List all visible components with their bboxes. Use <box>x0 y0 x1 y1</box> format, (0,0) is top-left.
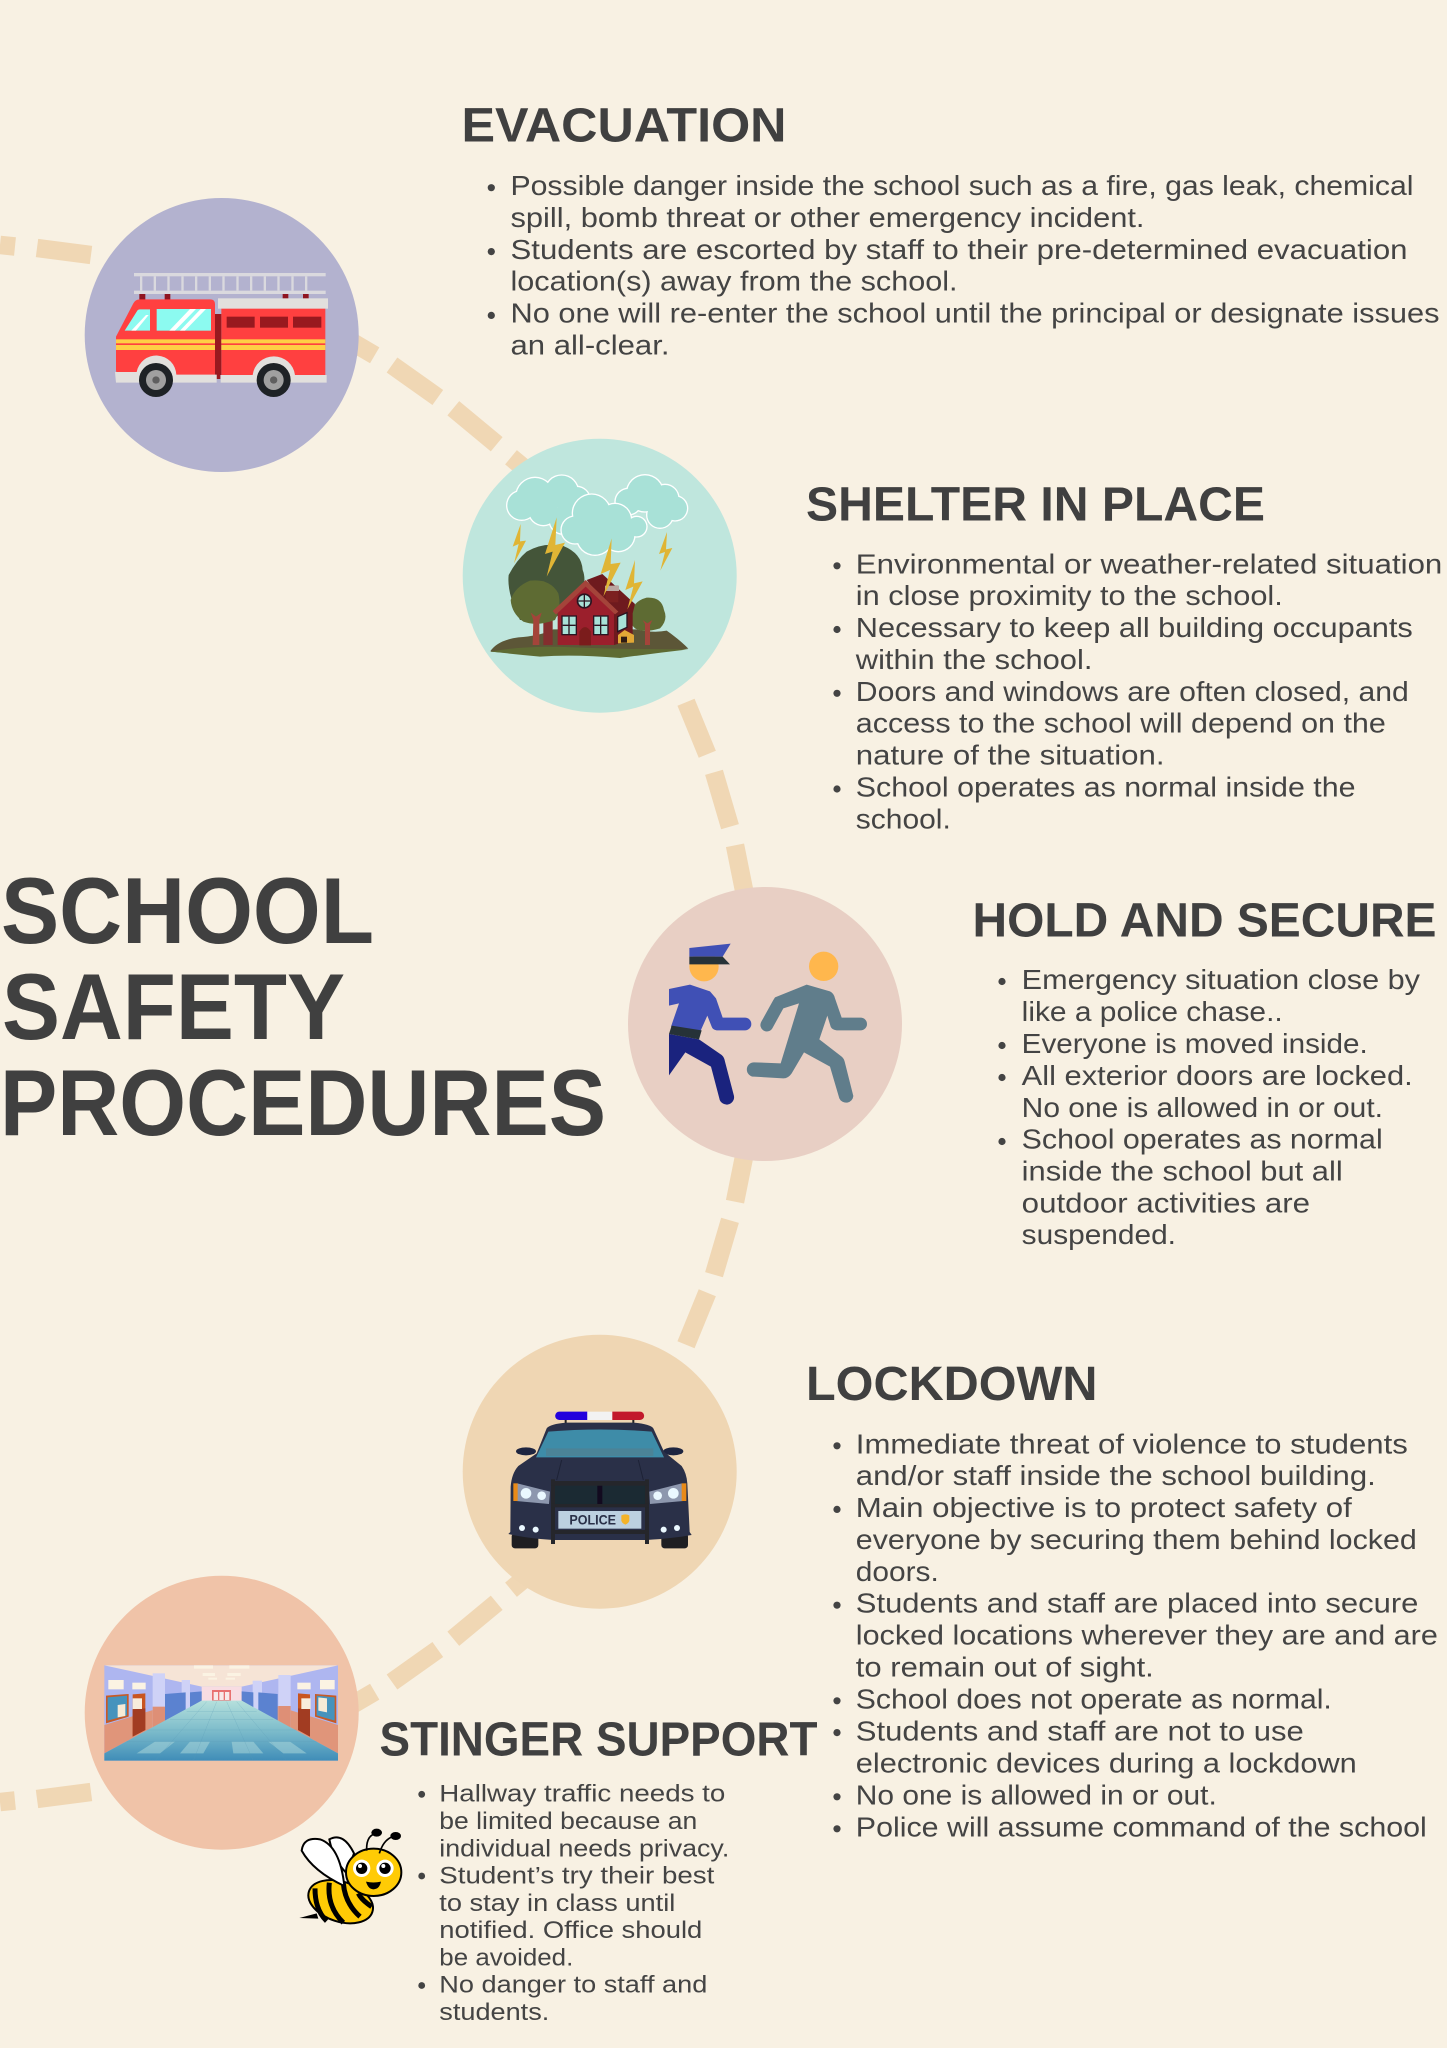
list: lockdown points: Main objective is to protect safety of <box>856 1492 1352 1523</box>
icon: police car: POLICE <box>569 1513 616 1528</box>
list: lockdown points: locked locations wherever they are and are <box>856 1620 1438 1651</box>
list: hold and secure points: School operates as normal <box>1022 1124 1383 1155</box>
list: stinger support points: No danger to staff and <box>439 1972 707 1999</box>
title: SAFETY <box>2 954 345 1059</box>
panel: shelter text <box>806 479 1442 834</box>
list: shelter points: nature of the situation. <box>856 740 1164 771</box>
list: hold and secure points: like a police chase.. <box>1022 996 1283 1027</box>
list: lockdown points: No one is allowed in or out. <box>856 1779 1217 1810</box>
list: evacuation points <box>488 170 1440 360</box>
icon: house in storm <box>491 474 688 658</box>
panel: stinger support text <box>380 1714 818 2026</box>
list: stinger support points: notified. Office should <box>439 1917 702 1944</box>
list: lockdown points: everyone by securing them behind locked <box>856 1524 1417 1555</box>
icon: bee mascot <box>299 1829 401 1931</box>
list: evacuation points: Possible danger inside the school such as a fire, gas leak, chemical <box>510 170 1414 201</box>
list: lockdown points: Immediate threat of violence to students <box>856 1428 1408 1459</box>
panel: hold and secure text <box>972 895 1436 1250</box>
list: hold and secure points: suspended. <box>1022 1219 1176 1250</box>
list: evacuation points: No one will re-enter the school until the principal or designate issues <box>510 298 1440 329</box>
list: lockdown points: and/or staff inside the school building. <box>856 1460 1376 1491</box>
list: lockdown points: Police will assume command of the school <box>856 1811 1427 1842</box>
list: shelter points: in close proximity to the school. <box>856 580 1283 611</box>
list: lockdown points: School does not operate as normal. <box>856 1683 1332 1714</box>
list: stinger support points: students. <box>439 1999 549 2026</box>
list: hold and secure points: inside the school but all <box>1022 1156 1343 1186</box>
icon: school hallway <box>104 1665 338 1761</box>
list: shelter points: School operates as normal inside the <box>856 772 1356 802</box>
list: stinger support points: Hallway traffic needs to <box>439 1781 725 1808</box>
list: shelter points: Environmental or weather-related situation <box>856 548 1442 579</box>
icon: police car <box>508 1412 692 1548</box>
list: stinger support points <box>418 1781 729 2026</box>
title <box>0 858 606 1155</box>
list: shelter points: access to the school will depend on the <box>856 708 1386 739</box>
panel: evacuation circle <box>85 198 359 472</box>
list: stinger support points: to stay in class until <box>439 1890 675 1917</box>
list: stinger support points: be limited because an <box>439 1808 697 1835</box>
panel: stinger support circle <box>85 1576 359 1850</box>
list: evacuation points: Students are escorted by staff to their pre-determined evacuation <box>510 234 1408 265</box>
list: stinger support points: individual needs privacy. <box>439 1835 729 1862</box>
list: hold and secure points: Everyone is moved inside. <box>1022 1028 1368 1059</box>
title: PROCEDURES <box>0 1050 606 1155</box>
list: evacuation points: spill, bomb threat or other emergency incident. <box>510 202 1144 233</box>
list: hold and secure points: Emergency situation close by <box>1022 964 1420 995</box>
list: shelter points: Doors and windows are often closed, and <box>856 676 1409 707</box>
heading: lockdown: LOCKDOWN <box>806 1358 1098 1411</box>
heading: hold and secure: HOLD AND SECURE <box>972 895 1436 948</box>
list: lockdown points: electronic devices during a lockdown <box>856 1748 1357 1778</box>
heading: evacuation: EVACUATION <box>462 100 786 153</box>
list: lockdown points <box>833 1428 1438 1842</box>
title: SCHOOL <box>1 858 374 963</box>
list: hold and secure points: outdoor activities are <box>1022 1187 1310 1218</box>
heading: shelter in place: SHELTER IN PLACE <box>806 479 1265 532</box>
list: lockdown points: to remain out of sight. <box>856 1652 1154 1682</box>
list: stinger support points: Student’s try their best <box>439 1862 715 1890</box>
list: shelter points: Necessary to keep all building occupants <box>856 612 1413 643</box>
dashed connecting arc <box>0 245 745 1802</box>
list: evacuation points: an all-clear. <box>510 330 670 360</box>
list: hold and secure points <box>998 964 1420 1250</box>
list: lockdown points: doors. <box>856 1556 939 1587</box>
panel: lockdown circle <box>463 1335 737 1609</box>
list: lockdown points: Students and staff are placed into secure <box>856 1588 1418 1619</box>
list: lockdown points: Students and staff are not to use <box>856 1716 1304 1747</box>
list: shelter points: school. <box>856 803 951 834</box>
list: hold and secure points: No one is allowed in or out. <box>1022 1092 1383 1123</box>
heading: stinger support: STINGER SUPPORT <box>380 1714 818 1767</box>
panel: lockdown text <box>806 1358 1438 1842</box>
list: stinger support points: be avoided. <box>439 1944 573 1971</box>
panel: evacuation text <box>462 100 1440 360</box>
list: evacuation points: location(s) away from the school. <box>510 266 958 297</box>
list: shelter points <box>833 548 1442 834</box>
panel: shelter circle <box>463 439 737 713</box>
panel: hold and secure circle <box>628 887 902 1161</box>
list: hold and secure points: All exterior doors are locked. <box>1022 1060 1413 1091</box>
icon: fire truck <box>115 273 328 397</box>
icon: police chasing runner <box>669 944 867 1105</box>
list: shelter points: within the school. <box>855 644 1092 675</box>
